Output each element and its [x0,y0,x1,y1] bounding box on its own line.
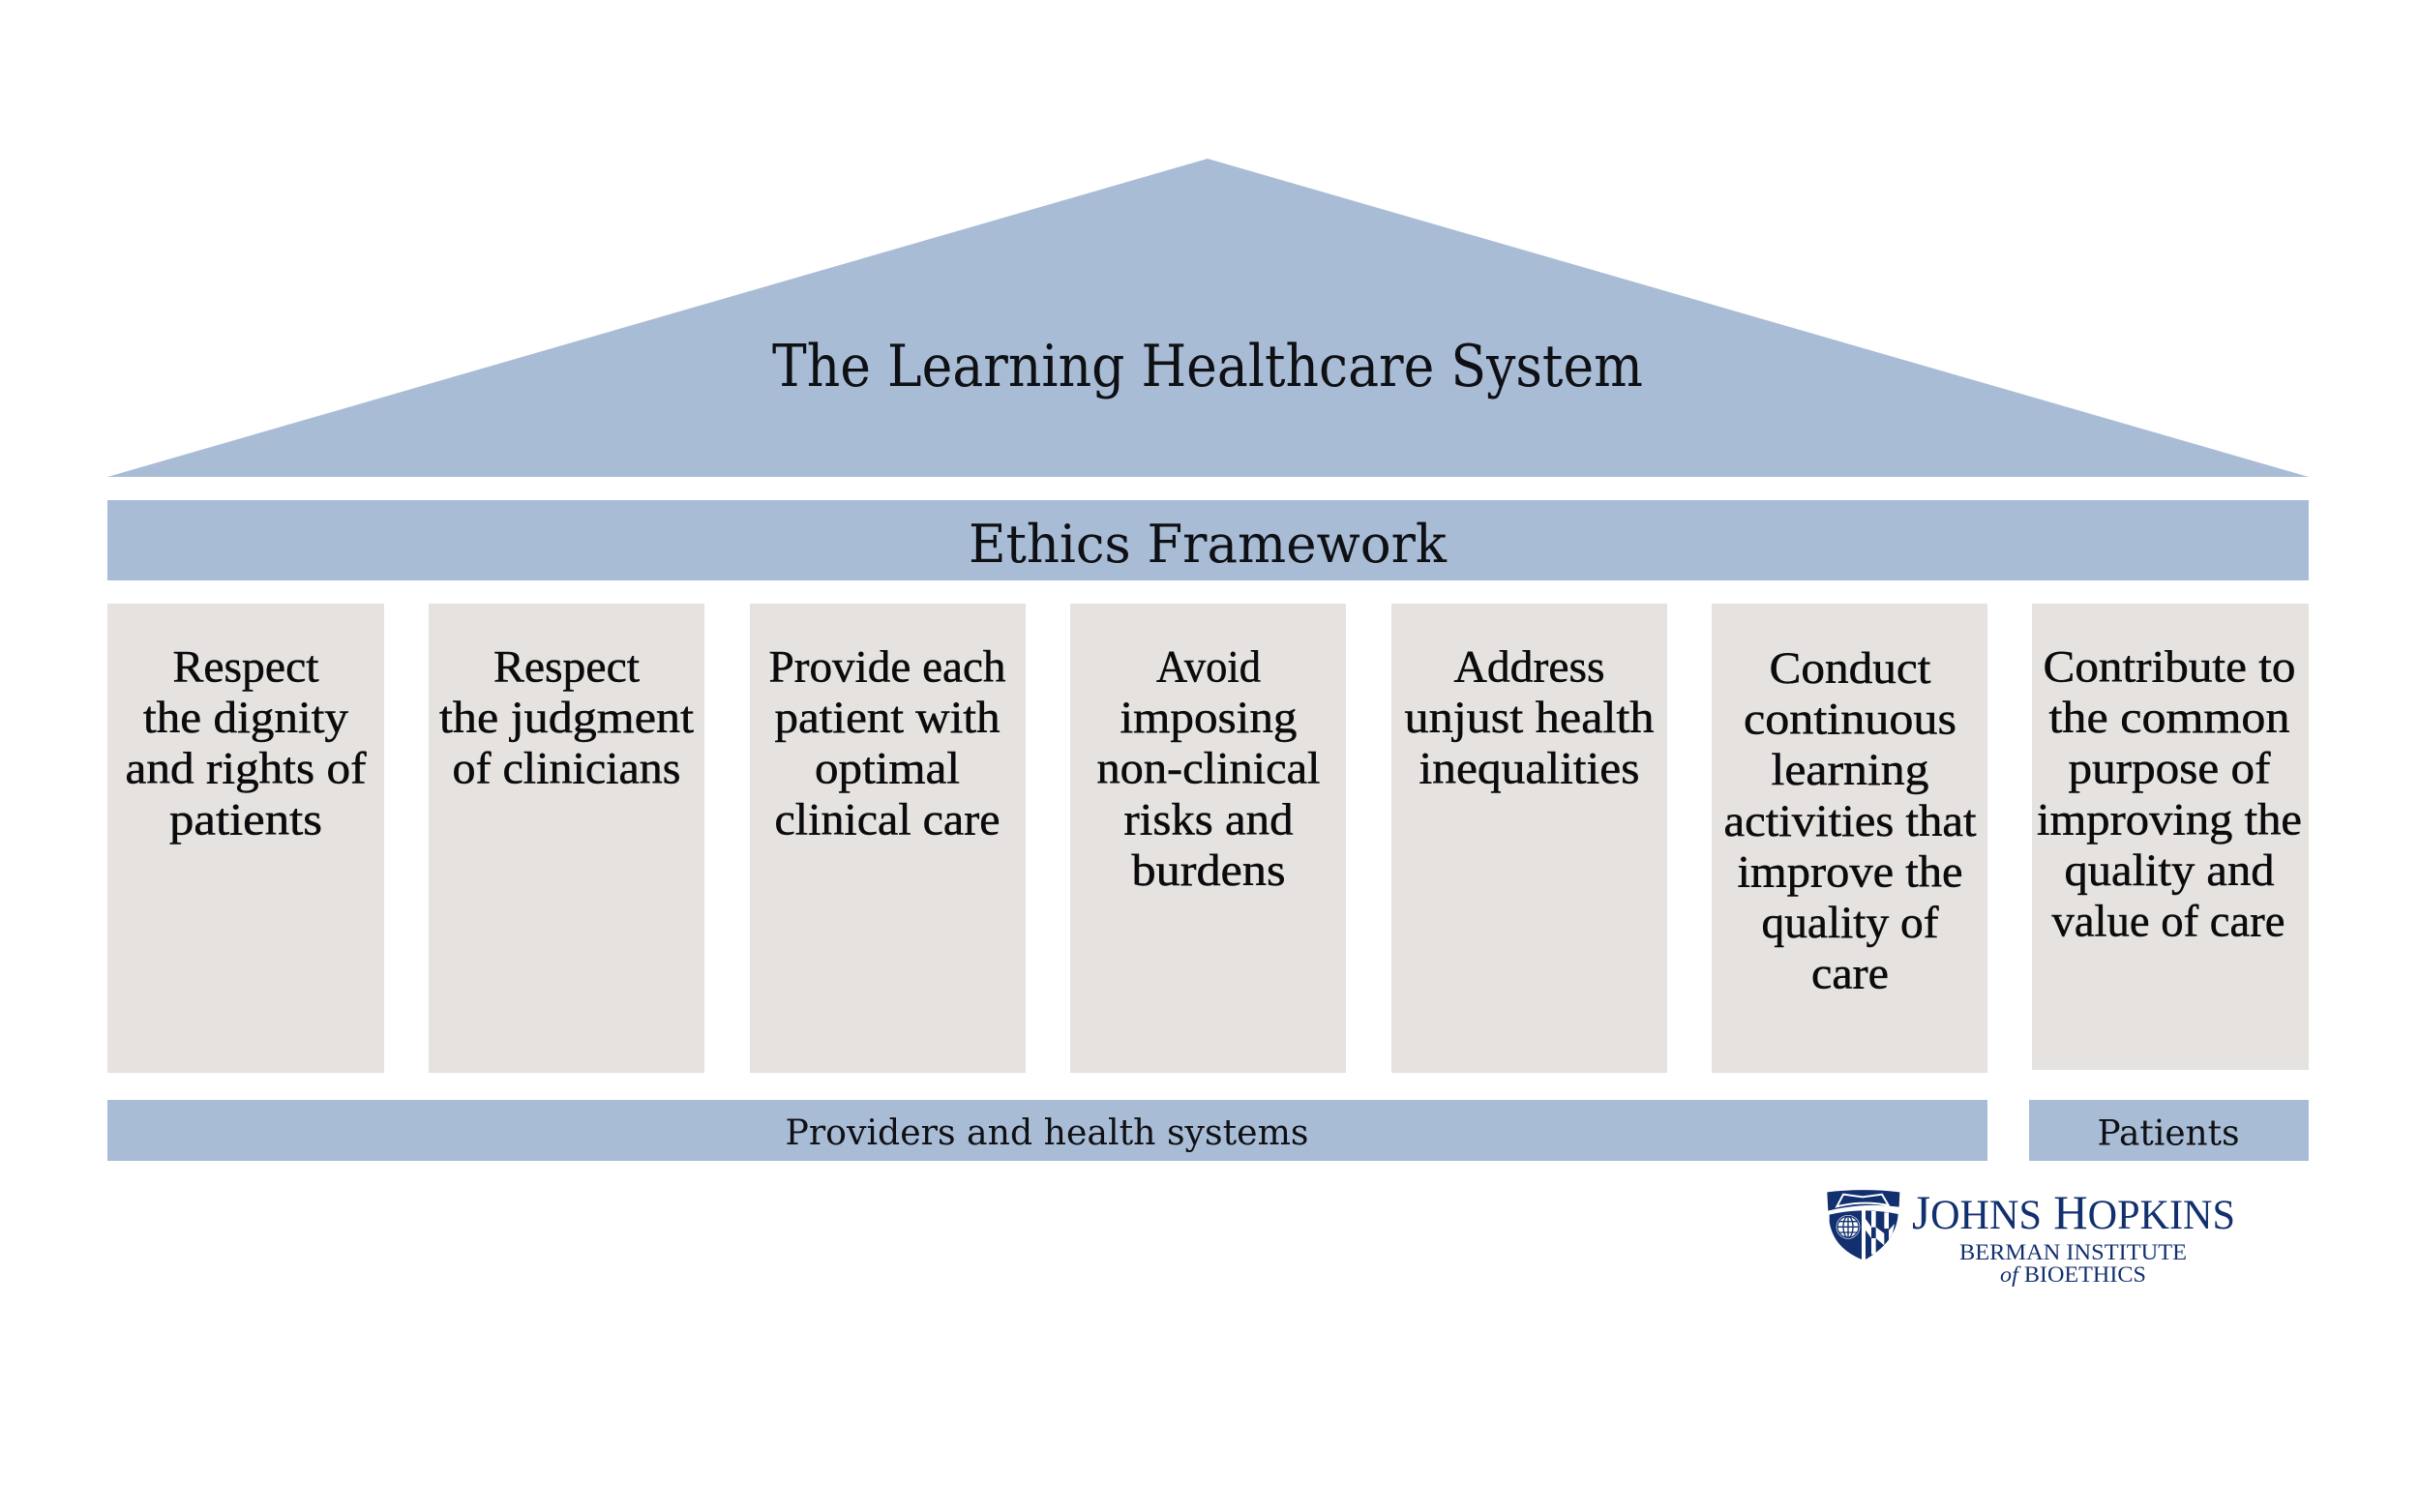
sub-line 2: of BIOETHICS [2000,1262,2146,1287]
pillar 4: non-clinical risks and burdens: non-clinical [1097,744,1320,794]
pillar 1: dignity and rights of patients: the dignity [143,693,349,743]
pillar 7: common purpose: purpose of [2069,744,2271,794]
pillar 5: unjust health inequalities: Address [1453,642,1604,693]
pillar 6: continuous learning activities: activities that [1724,796,1976,846]
pillar 5: unjust health inequalities: inequalities [1419,744,1639,794]
pillar 6: continuous learning activities: continuous [1744,695,1956,745]
pillar 4: non-clinical risks and burdens: Avoid [1156,642,1261,693]
pillar 2: judgment of clinicians: Respect [493,642,640,693]
pillar 1: dignity and rights of patients [107,604,384,1073]
icon: shield [1827,1190,1899,1260]
pillar 2: judgment of clinicians [429,604,704,1073]
pillar 6: continuous learning activities: quality of [1761,898,1939,948]
pillar 1: dignity and rights of patients: patients [169,794,322,845]
pillar 3: optimal clinical care: optimal [815,744,960,794]
bar: Providers and health systems [107,1100,1987,1161]
pillar 7: common purpose: improving the [2037,794,2302,845]
pillar 7: common purpose: value of care [2051,896,2285,946]
pillar 3: optimal clinical care: patient with [774,693,1000,743]
pillar 2: judgment of clinicians: the judgment [439,693,694,743]
pillar 1: dignity and rights of patients: and rights of [126,744,367,794]
bar: Providers and health systems: Providers and health systems [786,1113,1308,1153]
pillar 6: continuous learning activities: improve the [1738,846,1962,897]
pillar 7: common purpose: Contribute to [2044,642,2295,693]
pillar 6: continuous learning activities: Conduct [1769,643,1931,694]
pillar 3: optimal clinical care: clinical care [774,794,1000,845]
pillar 7: common purpose: the common [2049,693,2289,743]
title: The Learning Healthcare System [772,333,1643,400]
pillar 4: non-clinical risks and burdens: risks and [1124,794,1293,845]
pillar 3: optimal clinical care [750,604,1026,1073]
bar: Patients [2029,1100,2309,1161]
band heading: Ethics Framework [969,514,1448,575]
pillar 2: judgment of clinicians: of clinicians [453,744,681,794]
pillar 4: non-clinical risks and burdens [1070,604,1346,1073]
band: Ethics Framework [107,500,2309,580]
sub-line 1: BERMAN INSTITUTE [1959,1240,2187,1264]
pillar 6: continuous learning activities: learning [1771,745,1929,795]
pillar 7: common purpose [2032,604,2309,1070]
pillar 5: unjust health inequalities: unjust health [1405,693,1655,743]
pillar 5: unjust health inequalities [1391,604,1667,1073]
pillar 6: continuous learning activities: care [1811,949,1889,999]
pillar 3: optimal clinical care: Provide each [768,642,1006,693]
roof: The Learning Healthcare System [107,159,2309,477]
pillar 6: continuous learning activities [1712,604,1987,1073]
pillar 4: non-clinical risks and burdens: imposing [1120,693,1297,743]
logo: Johns Hopkins Berman Institute of Bioethics [1827,1185,2235,1287]
pillar 7: common purpose: quality and [2065,845,2274,896]
wordmark: JOHNS HOPKINS [1912,1185,2235,1239]
bar: Patients: Patients [2098,1114,2239,1153]
pillar 1: dignity and rights of patients: Respect [172,642,319,693]
pillar 4: non-clinical risks and burdens: burdens [1132,845,1285,896]
